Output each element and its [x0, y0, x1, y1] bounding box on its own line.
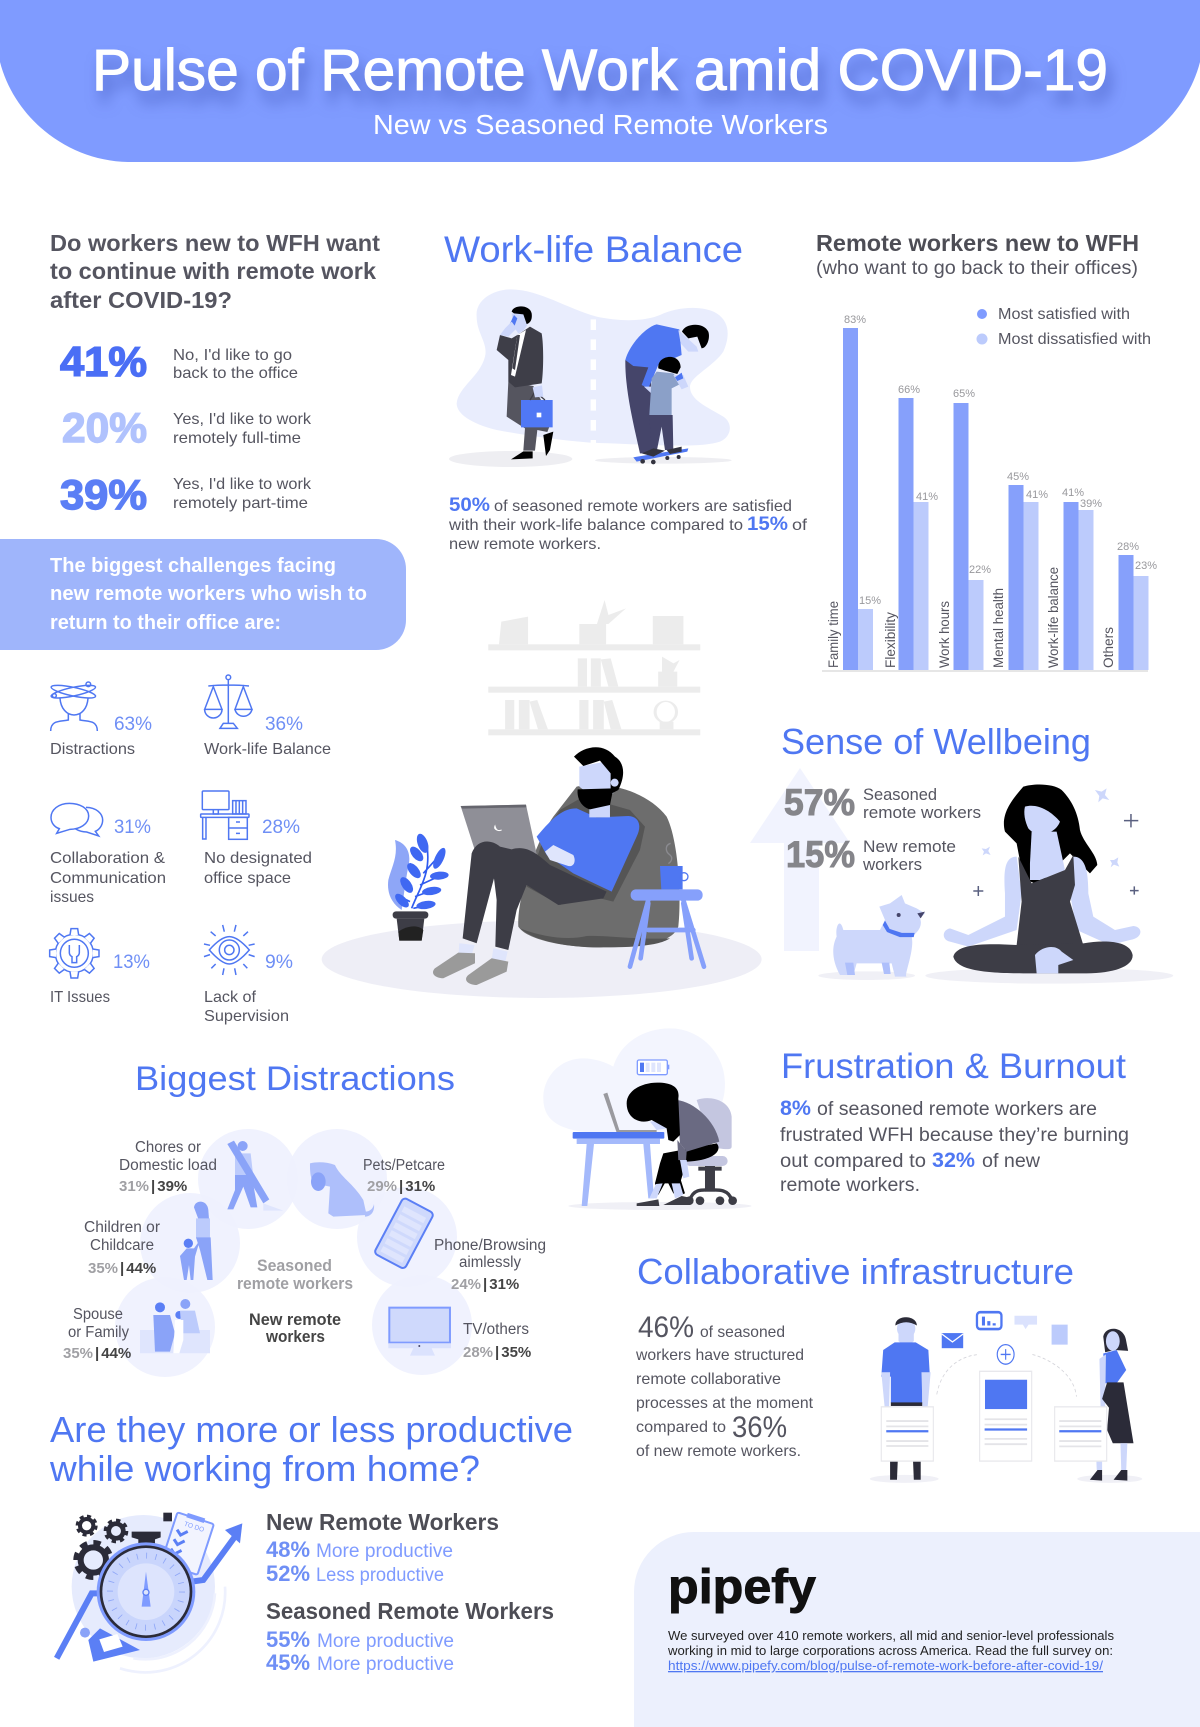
family on sofa — [140, 1299, 210, 1353]
mother and child — [180, 1202, 213, 1280]
illustration: meditating woman and dog — [818, 784, 1173, 984]
stat 20% — [62, 404, 312, 451]
description: remote workers. — [780, 1175, 920, 1196]
stats: New remote — [863, 837, 956, 856]
question heading: Do workers new to WFH want — [50, 230, 380, 256]
logo: pipefy — [668, 1561, 816, 1614]
axis labels: Mental health — [991, 588, 1006, 668]
description: 15% — [747, 514, 788, 535]
description: of new — [982, 1151, 1040, 1172]
sparkles — [982, 788, 1119, 867]
panel: biggest challenges — [0, 539, 406, 650]
percent pairs: 29%|31% — [367, 1178, 435, 1195]
labels: TV/others — [463, 1321, 529, 1338]
percentages — [113, 714, 303, 973]
stats: new remote workers: Less productive — [316, 1565, 444, 1586]
question heading — [50, 230, 380, 313]
axis labels: Family time — [826, 601, 841, 668]
woman — [1090, 1329, 1133, 1481]
percentages: 36% — [265, 714, 303, 735]
panel: remote workers bar chart — [816, 230, 1157, 671]
labels: Collaboration & — [50, 850, 165, 867]
panel: productivity — [49, 1409, 573, 1675]
percent pairs: 35%|44% — [63, 1345, 131, 1362]
gears — [76, 1516, 127, 1577]
description — [780, 1097, 1129, 1196]
stat 41% — [60, 338, 298, 385]
description: compared to — [636, 1419, 726, 1436]
labels: Communication — [50, 870, 166, 887]
icon: gear and wrench — [50, 929, 99, 978]
percent pairs: 24%|31% — [451, 1276, 519, 1293]
phone — [374, 1197, 434, 1269]
stats: new remote workers — [266, 1509, 499, 1586]
hand — [545, 845, 575, 866]
laptop — [461, 805, 537, 854]
labels: Domestic load — [119, 1157, 217, 1174]
stats — [784, 782, 981, 875]
center legend — [237, 1257, 353, 1346]
value labels: 41% — [1026, 489, 1048, 501]
value labels: 39% — [1080, 498, 1102, 510]
floating icons — [977, 1312, 1001, 1329]
stat 20%: remotely full-time — [173, 430, 301, 447]
stats: Seasoned — [863, 785, 937, 804]
stats: workers — [862, 855, 922, 874]
stats: new remote workers: 52% — [266, 1561, 310, 1586]
center legend: remote workers — [237, 1275, 353, 1293]
percent pairs — [63, 1178, 531, 1362]
question heading: to continue with remote work — [50, 258, 376, 284]
percentages: 31% — [114, 817, 151, 838]
description: processes at the moment — [636, 1395, 814, 1412]
stats: 57% — [784, 782, 855, 823]
stats: new remote workers: 48% — [266, 1537, 310, 1562]
labels: Childcare — [90, 1237, 154, 1254]
panel: biggest challenges: The biggest challenges facing — [50, 554, 336, 577]
labels: Work-life Balance — [204, 741, 331, 758]
panel: biggest challenges: new remote workers who wish to — [50, 582, 367, 605]
description: frustrated WFH because they’re burning — [780, 1125, 1129, 1146]
sweater — [537, 808, 639, 892]
stats: seasoned remote workers: 45% — [266, 1650, 310, 1675]
stat 41%: No, I'd like to go — [173, 347, 292, 364]
labels: Chores or — [135, 1139, 201, 1156]
man with broom — [227, 1141, 283, 1211]
value labels: 83% — [844, 314, 866, 326]
illustration: man on beanbag with laptop — [322, 747, 762, 998]
description: of seasoned remote workers are — [817, 1099, 1097, 1120]
center legend: Seasoned — [257, 1257, 332, 1275]
labels: issues — [50, 889, 94, 906]
heading: Work-life Balance — [444, 229, 743, 270]
labels — [50, 741, 331, 1025]
title: Pulse of Remote Work amid COVID-19 — [92, 38, 1108, 103]
description: out compared to — [780, 1151, 926, 1172]
description: remote collaborative — [636, 1371, 781, 1388]
beanbag — [518, 785, 680, 947]
stat 41%: back to the office — [173, 365, 298, 382]
legend — [976, 306, 1151, 348]
stats: seasoned remote workers: 55% — [266, 1627, 310, 1652]
value labels: 41% — [1062, 487, 1084, 499]
labels — [68, 1139, 546, 1341]
challenge icons and labels — [50, 675, 331, 1025]
description: of seasoned remote workers are satisfied — [494, 498, 792, 515]
labels: Supervision — [204, 1008, 289, 1025]
survey note — [667, 1628, 1114, 1673]
percentages: 9% — [265, 952, 293, 973]
labels: aimlessly — [459, 1254, 521, 1271]
description: 46% — [638, 1311, 694, 1344]
center legend: workers — [265, 1328, 325, 1346]
panel: footer — [634, 1532, 1200, 1727]
heading: Sense of Wellbeing — [781, 721, 1091, 762]
stat 41%: 41% — [60, 338, 147, 385]
stat 39%: remotely part-time — [173, 495, 308, 512]
header banner — [0, 0, 1200, 162]
labels: Children or — [84, 1219, 160, 1236]
labels: Spouse — [73, 1306, 123, 1323]
description: 36% — [732, 1411, 787, 1444]
center legend: New remote — [249, 1311, 341, 1329]
description: of new remote workers. — [636, 1443, 801, 1460]
chart heading: Remote workers new to WFH — [816, 230, 1139, 256]
subtitle: New vs Seasoned Remote Workers — [373, 109, 828, 140]
head — [589, 805, 610, 817]
heading — [49, 1409, 573, 1489]
description: 8% — [780, 1097, 811, 1120]
dog — [833, 895, 925, 977]
labels: or Family — [68, 1324, 129, 1341]
description: new remote workers. — [449, 536, 601, 553]
stat 20%: 20% — [62, 404, 147, 451]
stat 39%: Yes, I'd like to work — [173, 476, 312, 493]
description: with their work-life balance compared to — [448, 517, 743, 534]
feet — [458, 943, 475, 957]
description: 32% — [932, 1149, 975, 1172]
stat 39%: 39% — [60, 471, 147, 518]
bars — [843, 328, 1134, 670]
icon: scales — [205, 675, 252, 728]
heading: Frustration & Burnout — [781, 1047, 1126, 1086]
value labels: 41% — [916, 491, 938, 503]
man — [881, 1317, 931, 1480]
circles — [115, 1129, 472, 1377]
axis labels — [826, 567, 1116, 668]
stats: remote workers — [863, 803, 981, 822]
question heading: after COVID-19? — [50, 287, 232, 313]
illustration: stopwatch and growth arrow — [57, 1510, 242, 1672]
value labels: 45% — [1007, 471, 1029, 483]
axis labels: Flexibility — [883, 612, 898, 668]
legs — [463, 842, 607, 950]
labels: No designated — [204, 850, 312, 867]
description: of — [792, 517, 808, 534]
illustration: collaborators — [870, 1312, 1142, 1483]
panel: frustration and burnout — [543, 1028, 1129, 1210]
panel: collaborative infrastructure — [635, 1251, 1142, 1483]
description — [448, 495, 808, 553]
value labels: 15% — [859, 595, 881, 607]
panel: biggest challenges: return to their office are: — [50, 611, 281, 634]
panel: sense of wellbeing — [750, 721, 1173, 984]
value labels: 66% — [898, 384, 920, 396]
heading: Collaborative infrastructure — [637, 1251, 1074, 1292]
heading: Biggest Distractions — [135, 1060, 455, 1098]
axis labels: Others — [1101, 627, 1116, 668]
labels: Distractions — [50, 741, 135, 758]
labels: Phone/Browsing — [434, 1237, 546, 1254]
survey note: working in mid to large corporations across America. Read the full survey on: — [667, 1643, 1113, 1658]
legend: Most satisfied with — [998, 306, 1130, 323]
labels: Pets/Petcare — [363, 1157, 445, 1174]
stats: seasoned remote workers: Seasoned Remote Workers — [266, 1598, 554, 1624]
stats: seasoned remote workers: More productive — [317, 1631, 454, 1652]
value labels: 22% — [969, 564, 991, 576]
heading: Are they more or less productive — [50, 1409, 573, 1450]
envelope — [88, 1628, 140, 1662]
icon: speech bubbles — [51, 803, 103, 836]
legend: Most dissatisfied with — [998, 331, 1151, 348]
labels: office space — [204, 870, 291, 887]
percent pairs: 28%|35% — [463, 1344, 531, 1361]
stats: seasoned remote workers — [266, 1598, 554, 1675]
description: of seasoned — [700, 1324, 785, 1341]
illustration: exhausted worker — [543, 1028, 752, 1210]
stopwatch — [132, 1532, 161, 1548]
icons: distractions — [140, 1141, 451, 1356]
panel: continue with remote work — [50, 230, 380, 518]
value labels: 65% — [953, 388, 975, 400]
value labels: 28% — [1117, 541, 1139, 553]
panel: work-life balance — [444, 229, 808, 553]
percentages: 28% — [262, 817, 300, 838]
clipboard — [161, 1510, 215, 1575]
panel: biggest distractions — [63, 1060, 546, 1377]
percentages: 63% — [114, 714, 152, 735]
labels: Lack of — [204, 989, 257, 1006]
monitor — [388, 1308, 451, 1356]
survey note: https://www.pipefy.com/blog/pulse-of-remote-work-before-after-covid-19/ — [668, 1658, 1103, 1673]
icon: eye — [204, 925, 255, 975]
survey note: We surveyed over 410 remote workers, all mid and senior-level professionals — [668, 1628, 1114, 1643]
icon: desk — [201, 791, 249, 839]
stats: new remote workers: New Remote Workers — [266, 1509, 499, 1535]
stat 39% — [60, 471, 312, 518]
value labels: 23% — [1135, 560, 1157, 572]
illustration: commuter and parent — [449, 289, 732, 467]
stats: seasoned remote workers: More productive — [317, 1654, 454, 1675]
icon: distractions head — [50, 682, 97, 731]
plant — [388, 832, 449, 941]
illustration: shelves — [488, 600, 700, 735]
clipboard: TO DO — [183, 1521, 205, 1534]
axis labels: Work hours — [937, 601, 952, 668]
dog — [310, 1162, 374, 1217]
heading: while working from home? — [49, 1448, 480, 1489]
description — [635, 1311, 814, 1460]
percent pairs: 35%|44% — [88, 1260, 156, 1277]
stats: new remote workers: More productive — [316, 1541, 453, 1562]
labels: IT Issues — [50, 989, 110, 1006]
percent pairs: 31%|39% — [119, 1178, 187, 1195]
value labels — [844, 314, 1157, 607]
arrow — [750, 768, 850, 951]
stat 20%: Yes, I'd like to work — [173, 411, 312, 428]
percentages: 13% — [113, 952, 150, 973]
woman — [1004, 784, 1097, 885]
stats: 15% — [786, 834, 855, 875]
panel: remote workers bar chart: (who want to go back to their offices) — [816, 258, 1138, 279]
mug and table — [660, 866, 683, 889]
axis labels: Work-life balance — [1046, 567, 1061, 668]
documents — [881, 1371, 1107, 1461]
description: 50% — [449, 495, 490, 516]
description: workers have structured — [635, 1347, 804, 1364]
